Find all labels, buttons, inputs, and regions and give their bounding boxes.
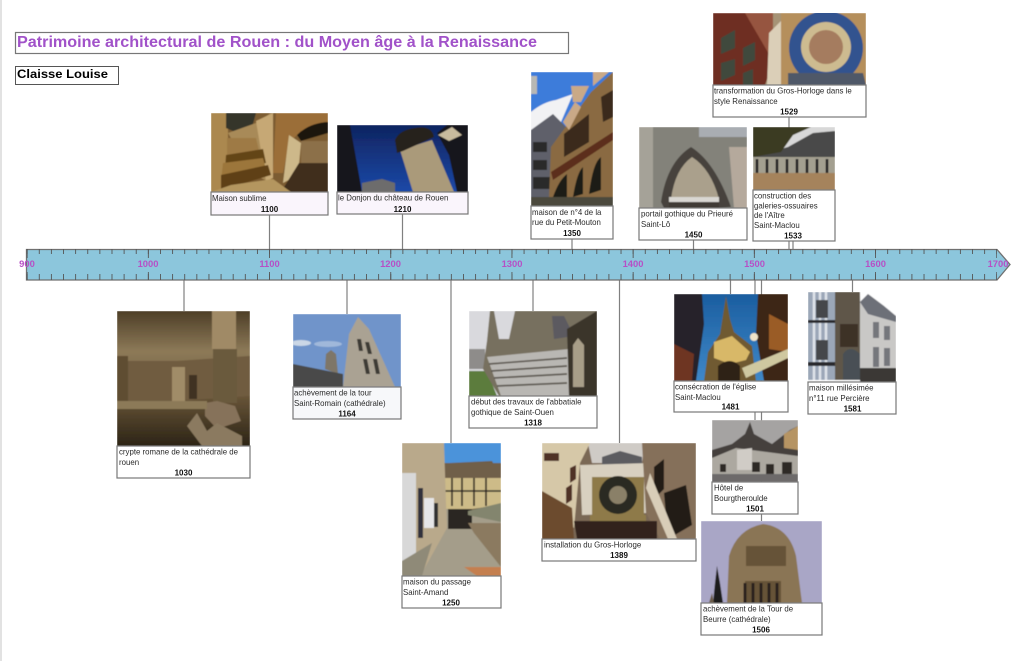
caption	[639, 208, 747, 240]
caption: achèvement de la tour	[294, 388, 372, 398]
axis labels: 1000	[138, 258, 158, 269]
photo: Aître Saint-Maclou	[753, 127, 835, 190]
connector: 1506	[760, 280, 762, 521]
card: 1164 Saint-Romain	[291, 314, 401, 419]
caption: transformation du Gros-Horloge dans le	[714, 86, 852, 96]
caption: rouen	[119, 458, 139, 467]
photo: rue Percière house	[808, 292, 896, 382]
caption: style Renaissance	[714, 97, 778, 106]
photo: Tour de Beurre	[701, 521, 822, 602]
card: 1501 Bourgtheroulde	[712, 420, 798, 514]
caption: portail gothique du Prieuré	[641, 210, 734, 218]
photo: Gros-Horloge	[542, 443, 696, 538]
caption: 1533	[784, 232, 802, 240]
caption: de l'Aître	[754, 211, 785, 220]
photo: Romanesque crypt	[117, 311, 250, 446]
caption: Saint-Maclou	[675, 393, 721, 402]
caption: 1100	[261, 205, 279, 214]
card: 1250 passage Saint-Amand	[402, 443, 501, 608]
caption: Saint-Maclou	[754, 221, 800, 230]
card: 1506 Tour de Beurre	[701, 521, 822, 635]
caption	[211, 192, 328, 215]
axis labels: 1500	[744, 258, 765, 269]
caption	[753, 190, 835, 241]
caption: 1250	[442, 598, 460, 608]
timeline axis	[19, 250, 1010, 280]
photo: Donjon tower	[337, 125, 468, 192]
caption: installation du Gros-Horloge	[544, 540, 642, 550]
caption: maison millésimée	[809, 384, 874, 392]
caption: construction des	[754, 192, 811, 200]
card: 1210 Donjon	[337, 125, 468, 214]
caption: crypte romane de la cathédrale de	[119, 448, 239, 456]
axis labels: 1100	[259, 258, 280, 269]
caption	[713, 85, 866, 117]
caption: 1030	[175, 468, 193, 478]
caption: Saint-Romain (cathédrale)	[294, 399, 386, 408]
axis labels: 1300	[502, 258, 522, 269]
connector: 1529	[788, 117, 790, 249]
connector: 1481	[730, 280, 732, 294]
caption: 1164	[338, 410, 356, 418]
caption: Bourgtheroulde	[714, 494, 768, 503]
caption: Saint-Lô	[641, 220, 671, 229]
card: 1581 rue Percière	[808, 292, 896, 414]
caption: Hôtel de	[714, 484, 744, 492]
caption: 1501	[746, 504, 764, 514]
caption	[542, 539, 696, 561]
caption: 1350	[563, 229, 581, 238]
caption	[402, 576, 501, 608]
photo: Hôtel de Bourgtheroulde	[712, 420, 798, 482]
caption: maison de n°4 de la	[532, 208, 602, 217]
caption	[293, 387, 401, 419]
photo: stone staircase	[211, 113, 328, 192]
caption: Maison sublime	[212, 194, 267, 203]
caption: début des travaux de l'abbatiale	[471, 398, 582, 406]
axis labels: 1200	[380, 258, 401, 269]
connector: 1350	[571, 239, 573, 249]
caption: 1529	[780, 108, 798, 116]
photo: Saint-Romain tower	[293, 314, 401, 386]
caption: achèvement de la Tour de	[703, 604, 794, 614]
caption	[712, 482, 798, 514]
author: Claisse Louise	[17, 67, 108, 81]
photo: Saint-Ouen abbey	[469, 311, 597, 396]
author	[16, 66, 118, 84]
caption: consécration de l'église	[675, 382, 757, 392]
caption: 1450	[685, 230, 703, 240]
card: 1533 Aître Saint-Maclou	[753, 127, 835, 241]
caption	[117, 446, 250, 478]
photo: half-timbered house	[531, 72, 613, 206]
caption	[337, 192, 468, 214]
card: 1318 Saint-Ouen	[469, 311, 597, 428]
connector: 1318	[532, 280, 534, 311]
caption	[469, 396, 597, 428]
caption: gothique de Saint-Ouen	[471, 408, 554, 417]
photo: Saint-Maclou at dusk	[674, 294, 788, 380]
axis labels: 1400	[623, 258, 643, 269]
caption: maison du passage	[403, 578, 472, 586]
connector: 1100	[268, 215, 270, 249]
caption: 1210	[394, 205, 412, 214]
card: 1350 Petit-Mouton	[531, 72, 613, 239]
connector: 1450	[692, 240, 694, 249]
caption	[674, 381, 788, 412]
axis labels: 900	[19, 258, 35, 269]
caption: galeries-ossuaires	[754, 202, 818, 210]
photo: Gros-Horloge detail	[713, 13, 866, 84]
caption	[808, 382, 896, 414]
photo: passage Saint-Amand	[402, 443, 501, 576]
caption: 1481	[722, 402, 740, 412]
connector: 1533	[792, 241, 794, 249]
card: 1030 crypte	[117, 311, 250, 478]
caption: 1581	[844, 404, 862, 414]
axis labels: 1600	[865, 258, 886, 269]
card: 1389 Gros-Horloge	[542, 443, 696, 561]
photo: Gothic portal	[639, 127, 747, 208]
caption: 1389	[610, 551, 628, 560]
caption: rue du Petit-Mouton	[532, 218, 601, 227]
card: 1481 Saint-Maclou	[674, 294, 788, 412]
card: 1100 Maison sublime	[211, 113, 328, 215]
caption: le Donjon du château de Rouen	[338, 194, 448, 202]
connector: 1030	[183, 280, 185, 311]
caption: Beurre (cathédrale)	[703, 615, 771, 624]
card: 1450 Saint-Lô	[639, 127, 747, 240]
caption: Saint-Amand	[403, 588, 448, 597]
axis labels	[19, 258, 1008, 269]
connector: 1210	[402, 214, 404, 249]
caption	[531, 206, 613, 239]
connector: 1250	[450, 280, 452, 443]
caption: n°11 rue Percière	[809, 394, 870, 403]
caption: 1506	[752, 626, 770, 634]
connector: 1389	[618, 280, 620, 443]
card: 1529 Renaissance	[713, 11, 866, 117]
connector: 1501	[754, 280, 756, 420]
axis labels: 1700	[988, 258, 1008, 269]
title: Patrimoine architectural de Rouen : du Moyen âge à la Renaissance	[17, 34, 537, 51]
caption: 1318	[524, 418, 542, 428]
connector: 1581	[852, 280, 854, 292]
caption	[701, 603, 822, 635]
connector: 1164	[346, 280, 348, 314]
